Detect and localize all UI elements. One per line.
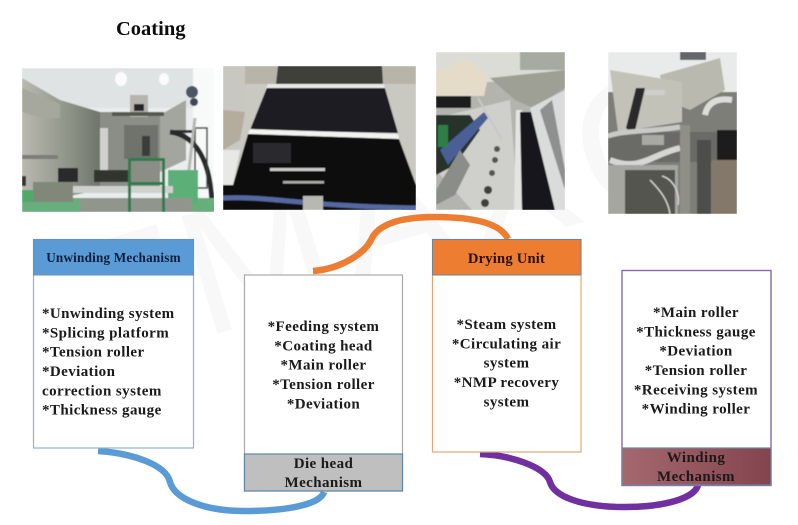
list: drying items: *NMP recovery [454,375,559,391]
footer: die head mechanism: Die head [294,456,354,472]
list: die head items: *Tension roller [272,377,375,393]
list: unwinding items: *Tension roller [42,345,145,361]
watermark: TMAXC [45,24,737,408]
photo: unwinding machine [22,68,214,212]
photo: drying unit maintenance [436,52,565,210]
list: winding items: *Receiving system [634,382,758,398]
list: drying items: system [484,394,530,410]
list: winding items: *Winding roller [642,402,750,418]
list: die head items: *Feeding system [268,319,379,335]
panel: die head mechanism [244,275,402,491]
panel: drying unit [432,240,581,452]
arrow: purple connector [480,454,698,507]
header: unwinding mechanism: Unwinding Mechanism [46,250,181,265]
footer: winding mechanism: Winding [667,450,725,466]
footer: winding mechanism: Mechanism [657,469,735,485]
list: winding items: *Thickness gauge [636,324,756,340]
list: unwinding items: *Unwinding system [42,306,175,322]
list: die head items: *Deviation [287,396,360,412]
list: winding items: *Main roller [653,305,739,321]
footer: die head mechanism: Mechanism [285,475,363,491]
list: unwinding items: correction system [42,383,162,399]
footer: die head mechanism [244,454,402,491]
arrow: blue connector [98,451,324,511]
list: unwinding items: *Splicing platform [42,325,169,341]
list: unwinding items: *Deviation [42,364,116,380]
list: die head items: *Main roller [280,358,366,374]
list: die head items: *Coating head [274,338,373,354]
photo: coating web [223,66,416,210]
list: winding items: *Tension roller [645,363,747,379]
list: unwinding items: *Thickness gauge [42,403,162,419]
list: drying items: system [484,356,530,372]
header: drying unit [432,240,581,275]
header: unwinding mechanism [34,240,194,275]
panel: unwinding mechanism [34,240,194,448]
arrow: orange connector [313,217,508,271]
list: winding items: *Deviation [659,344,733,360]
list: drying items: *Circulating air [452,336,561,352]
list: drying items: *Steam system [456,317,557,333]
photo: winding mechanism [608,52,737,214]
footer: winding mechanism [622,448,771,485]
panel: winding mechanism [622,270,771,486]
title: Coating [116,18,186,40]
header: drying unit: Drying Unit [468,251,545,267]
